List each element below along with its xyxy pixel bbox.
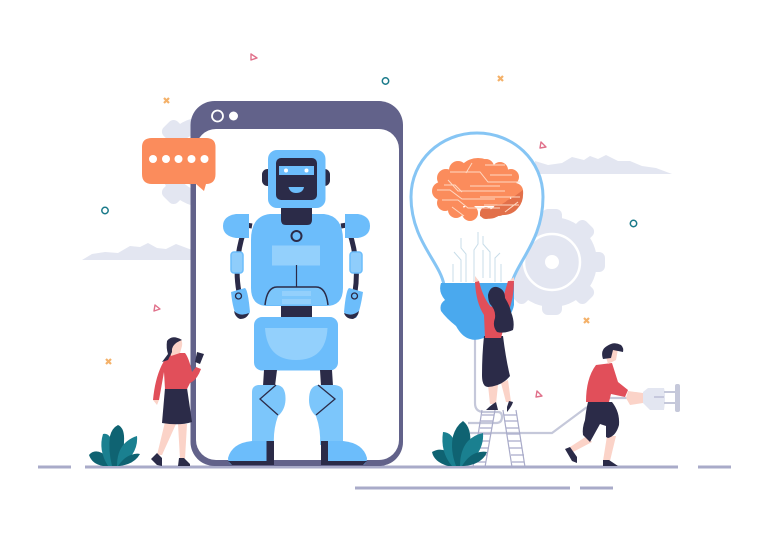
shoes (486, 401, 513, 412)
woman with phone (151, 337, 204, 466)
robot head (268, 150, 326, 208)
head and hair (170, 338, 182, 356)
skirt (482, 336, 510, 387)
hair (602, 343, 623, 359)
skirt (162, 388, 192, 424)
shoes (565, 447, 618, 466)
plant left (89, 425, 140, 466)
plant right (432, 421, 487, 466)
robot left arm parts (223, 214, 250, 319)
robot arms (237, 225, 356, 292)
phone frame (190, 101, 403, 466)
top and arms (153, 353, 201, 400)
legs (488, 380, 511, 404)
shirt (586, 363, 628, 402)
cloud right (535, 155, 672, 174)
ladder (473, 410, 525, 467)
hands (475, 276, 514, 282)
shoes (151, 453, 190, 466)
bulb base (440, 283, 514, 340)
phone camera dots (212, 110, 238, 122)
plug (643, 388, 665, 410)
robot waist (281, 306, 312, 317)
background gear left (151, 109, 257, 215)
robot right arm parts (344, 214, 370, 319)
legs (157, 422, 187, 459)
robot torso (251, 208, 343, 306)
head (604, 349, 618, 364)
hair (488, 287, 514, 333)
robot ears (262, 169, 330, 186)
decorative crosses (106, 76, 589, 364)
background gear right (499, 209, 605, 315)
robot legs (252, 370, 343, 445)
woman on ladder (475, 276, 514, 412)
hands and plug neck (626, 391, 643, 405)
cloud left (82, 243, 192, 260)
brain (432, 158, 523, 221)
light bulb (411, 133, 543, 340)
robot feet (228, 441, 367, 465)
arms and top (475, 281, 514, 338)
shorts (583, 402, 619, 442)
speech bubble (142, 138, 216, 191)
decorative triangles (154, 54, 546, 397)
robot (223, 150, 370, 465)
robot pelvis (254, 317, 338, 370)
decorative circles (102, 78, 637, 227)
filaments (453, 232, 501, 282)
hand (153, 400, 159, 405)
cables (468, 335, 630, 433)
ground lines (38, 466, 731, 490)
man with plug (565, 343, 680, 466)
bare legs (570, 436, 616, 461)
phone (195, 352, 204, 364)
